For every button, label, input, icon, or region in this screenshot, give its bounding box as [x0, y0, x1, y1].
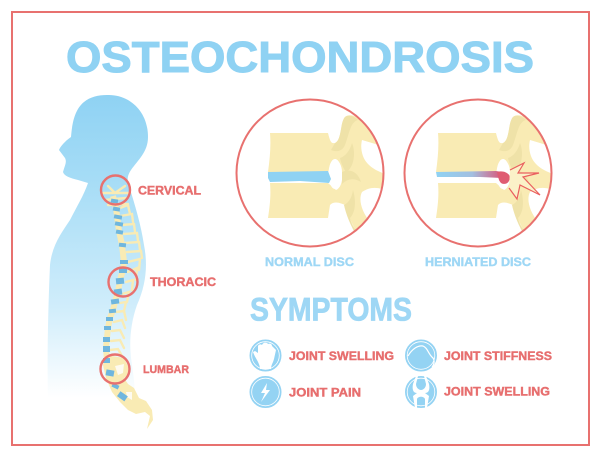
- panel: herniated disc: [404, 100, 563, 246]
- marker: cervical: [101, 176, 130, 204]
- label: normal disc: NORMAL DISC: [265, 255, 354, 269]
- body silhouette: [48, 95, 148, 398]
- disc: herniated: [436, 171, 502, 178]
- marker: lumbar: [100, 354, 130, 384]
- label: thoracic: THORACIC: [150, 275, 216, 289]
- label: lumbar: LUMBAR: [143, 364, 189, 376]
- label: joint stiffness: JOINT STIFFNESS: [444, 349, 552, 363]
- icon: joint swelling: [406, 376, 436, 408]
- spine: vertebral column: [106, 196, 124, 395]
- spine: processes: [103, 186, 142, 356]
- pain burst: [509, 163, 540, 199]
- spine: lumbar and sacrum: [103, 356, 153, 429]
- label: joint swelling: JOINT SWELLING: [289, 349, 394, 363]
- bulge: [497, 171, 510, 184]
- title: OSTEOCHONDROSIS: [66, 33, 534, 82]
- panel: normal disc: [236, 100, 395, 246]
- heading: symptoms: SYMPTOMS: [250, 292, 412, 328]
- spine: intervertebral discs: [103, 199, 128, 401]
- label: joint pain: JOINT PAIN: [289, 386, 361, 400]
- icon: joint pain: [250, 376, 281, 408]
- icon: joint stiffness: [406, 340, 436, 371]
- marker: thoracic: [108, 268, 138, 296]
- label: cervical: CERVICAL: [138, 184, 201, 198]
- label: joint swelling: JOINT SWELLING: [444, 384, 550, 398]
- icon: hand swelling: [250, 340, 281, 371]
- body figure with spine: [48, 95, 153, 429]
- label: herniated disc: HERNIATED DISC: [425, 255, 531, 269]
- disc: healthy: [268, 171, 331, 183]
